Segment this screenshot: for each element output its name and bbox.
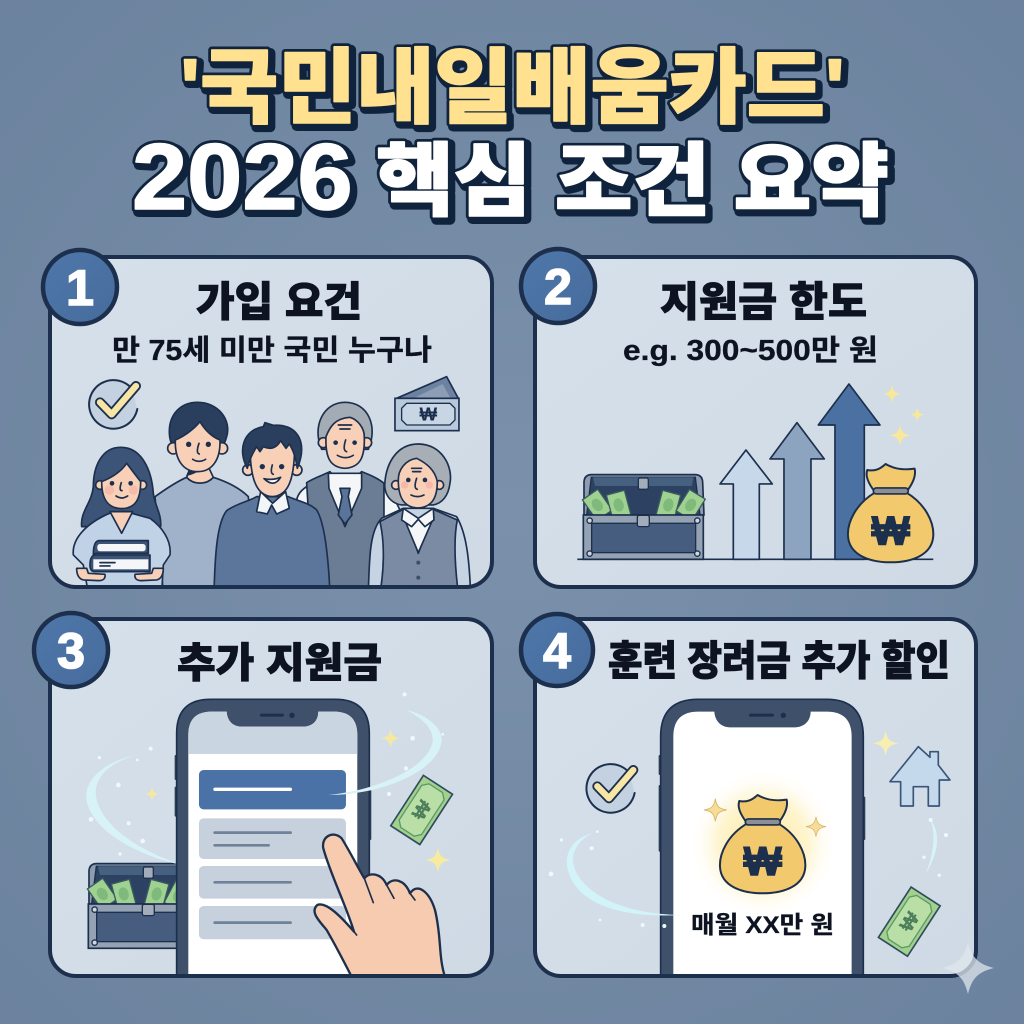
person: young man	[154, 402, 250, 585]
number badge 3: 3	[57, 623, 85, 679]
title: line 2: 2026 핵심 조건 요약	[132, 124, 889, 229]
illustration: phone with money bag	[549, 699, 950, 990]
person: older man	[297, 402, 400, 593]
sparkle dots: right	[922, 818, 948, 877]
list row 3	[199, 866, 346, 899]
panel 4: 훈련 장려금 추가 할인	[521, 614, 976, 990]
heading: 추가 지원금	[177, 640, 382, 686]
sparkle: top right	[873, 731, 898, 756]
title: line 1: '국민내일배움카드'	[183, 46, 848, 137]
title: line 1: '국민내일배움카드'	[180, 43, 845, 134]
swoosh: left	[567, 833, 683, 916]
icon: green banknote	[391, 775, 453, 845]
icon: won banknote	[395, 377, 459, 431]
sparkle: right bottom	[425, 847, 451, 873]
title: line 2: 2026 핵심 조건 요약	[132, 124, 889, 229]
icon: won money bag	[848, 464, 933, 562]
yellow glow	[701, 781, 826, 906]
title: line 2: 2026 핵심 조건 요약	[135, 127, 892, 232]
number badge 3	[34, 613, 108, 687]
number badge 4: 4	[543, 623, 571, 679]
sparkle: left	[145, 787, 159, 801]
person: boy in sweater	[214, 423, 330, 593]
heading: 훈련 장려금 추가 할인	[608, 638, 950, 684]
icon: won money bag: ₩	[743, 838, 782, 884]
card border	[535, 619, 976, 976]
icon: green banknote: ₩	[408, 797, 437, 824]
sparkle dots: left	[549, 830, 666, 928]
icon: treasure chest	[86, 862, 176, 950]
sparkle dots: right	[387, 692, 444, 796]
phone	[175, 699, 371, 990]
list row 2	[199, 818, 346, 859]
icon: treasure chest	[582, 475, 705, 559]
panel 3: 추가 지원금	[34, 613, 492, 990]
icon: won money bag	[720, 795, 805, 893]
heading: 지원금 한도	[660, 279, 867, 325]
heading: 가입 요건	[196, 279, 362, 325]
icon: won money bag: ₩	[871, 508, 910, 554]
swoosh: left	[86, 755, 182, 865]
list row 4	[199, 906, 346, 939]
number badge 4	[521, 614, 593, 686]
icon: check mark	[586, 764, 635, 813]
subheading: 만 75세 미만 국민 누구나	[112, 334, 432, 367]
icon: pointing hand	[313, 833, 446, 974]
sparkles	[883, 385, 925, 446]
card border	[535, 257, 976, 587]
sparkle: right top	[381, 729, 400, 748]
illustration: chest, arrows, money bag	[577, 384, 933, 562]
person: older woman	[368, 444, 471, 593]
swoosh: right	[926, 820, 937, 873]
list row: selected	[199, 770, 346, 809]
icon: green banknote	[878, 887, 940, 956]
swoosh: right	[328, 710, 442, 795]
illustration: five people with icons	[73, 377, 471, 593]
icon: house	[890, 747, 950, 806]
phone caption: 매월 XX만 원	[691, 912, 834, 939]
corner sparkle mark	[942, 942, 994, 994]
phone	[659, 699, 865, 990]
icon: check mark	[89, 380, 137, 429]
panel 1: 가입 요건	[43, 250, 492, 593]
growth arrows	[720, 384, 880, 559]
title: line 1: '국민내일배움카드'	[180, 43, 845, 134]
number badge 1	[43, 250, 117, 324]
number badge 1: 1	[66, 260, 94, 316]
card border	[50, 619, 492, 976]
ground line	[577, 557, 933, 562]
card border	[50, 257, 492, 587]
sparkle dots: left	[89, 747, 153, 856]
number badge 2: 2	[544, 259, 572, 315]
subheading: e.g. 300~500만 원	[623, 334, 878, 367]
panel 2: 지원금 한도	[521, 249, 976, 587]
number badge 2	[521, 249, 595, 323]
icon: won banknote: ₩	[419, 403, 437, 424]
illustration: phone and hand	[86, 692, 453, 990]
sparkles on screen	[704, 799, 826, 837]
icon: green banknote: ₩	[896, 908, 925, 936]
person: girl with books	[73, 447, 170, 593]
